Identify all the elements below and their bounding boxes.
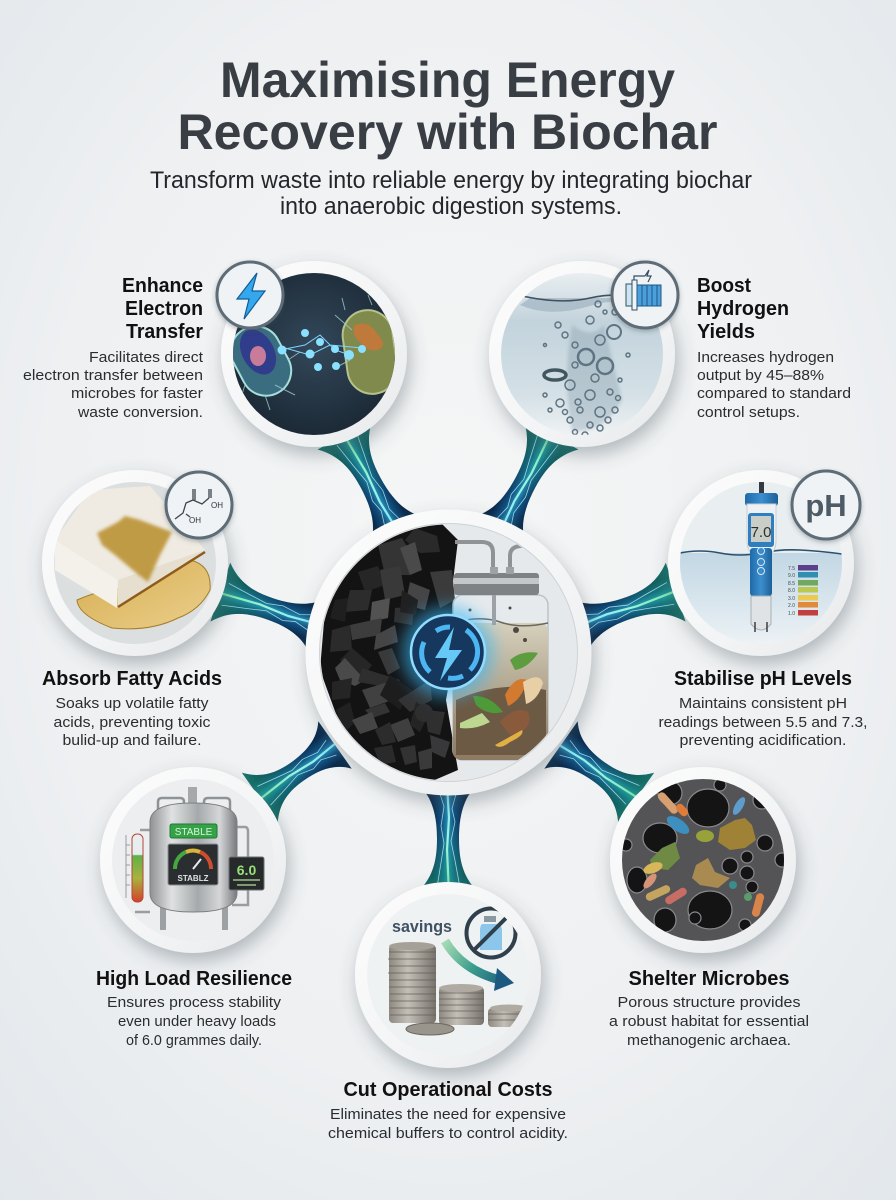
title <box>178 52 718 160</box>
heading: Boost <box>697 275 751 297</box>
subtitle <box>150 167 752 220</box>
bubbles <box>520 294 631 435</box>
biochar pile <box>320 522 458 782</box>
description: Increases hydrogen <box>697 349 834 366</box>
microbes <box>222 295 401 410</box>
description: even under heavy loads <box>118 1013 276 1030</box>
text: enhance electron transfer <box>23 275 204 421</box>
description: waste conversion. <box>77 404 203 421</box>
title: Recovery with Biochar <box>178 104 718 160</box>
description: Maintains consistent pH <box>679 695 847 712</box>
text: stabilise pH levels <box>658 668 868 749</box>
heading: Enhance <box>122 275 203 297</box>
digester tank: 6.0 <box>237 862 256 878</box>
text: boost hydrogen yields <box>697 275 851 421</box>
heading <box>122 275 203 343</box>
description: of 6.0 grammes daily. <box>126 1032 262 1049</box>
description: bulid-up and failure. <box>62 732 202 749</box>
panel: high load resilience image <box>100 767 286 953</box>
description: preventing acidification. <box>680 732 846 749</box>
panel: shelter microbes image <box>610 767 796 953</box>
pH colour scale: 8.0 <box>788 588 795 594</box>
energy icon <box>402 606 494 698</box>
description: acids, preventing toxic <box>54 714 211 731</box>
pH colour scale: 3.0 <box>788 596 795 602</box>
description <box>697 349 851 421</box>
coin stacks <box>388 942 528 1035</box>
description: readings between 5.5 and 7.3, <box>658 714 868 731</box>
description <box>54 695 211 749</box>
icon: crossed bottle <box>466 908 516 958</box>
description: Facilitates direct <box>89 349 204 366</box>
pH meter <box>745 480 778 632</box>
pH colour scale: 1.0 <box>788 611 795 617</box>
description: control setups. <box>697 404 800 421</box>
microbes <box>641 791 765 918</box>
description: Porous structure provides <box>618 994 800 1011</box>
icon: molecule <box>166 472 232 538</box>
text: absorb fatty acids <box>42 668 222 749</box>
description: electron transfer between <box>23 367 203 384</box>
description <box>23 349 204 421</box>
icon: molecule: OH <box>211 501 223 510</box>
icon: pH badge: pH <box>805 488 847 523</box>
panel: enhance electron transfer image <box>217 261 407 447</box>
panel: absorb fatty acids image <box>42 470 232 656</box>
description: Eliminates the need for expensive <box>330 1106 566 1123</box>
porous biochar <box>620 779 789 932</box>
icon: pH badge <box>792 471 860 539</box>
oil pool <box>77 560 210 629</box>
digester tank: STABLE <box>175 827 213 838</box>
description: microbes for faster <box>71 385 203 402</box>
digester jar <box>453 542 548 760</box>
centre hub: biochar and digester <box>306 510 592 796</box>
description <box>328 1106 568 1142</box>
title: Maximising Energy <box>220 52 675 108</box>
subtitle: into anaerobic digestion systems. <box>280 193 622 220</box>
icon: electrolyser <box>612 262 678 328</box>
description: compared to standard <box>697 385 851 402</box>
text: high load resilience <box>96 968 292 1049</box>
panel: cut operational costs image <box>355 882 541 1068</box>
description: a robust habitat for essential <box>609 1013 809 1030</box>
description: output by 45–88% <box>697 367 824 384</box>
pH colour scale: 9.0 <box>788 573 795 579</box>
heading: Transfer <box>126 321 203 343</box>
description: chemical buffers to control acidity. <box>328 1125 568 1142</box>
heading: Cut Operational Costs <box>344 1079 552 1101</box>
heading: Yields <box>697 321 755 343</box>
sponge <box>55 486 205 608</box>
arrow: falling cost <box>445 941 514 991</box>
label: savings: savings <box>392 917 452 936</box>
description: Ensures process stability <box>107 994 282 1011</box>
panel: boost hydrogen yields image <box>489 261 678 447</box>
pH colour scale <box>788 565 818 617</box>
subtitle: Transform waste into reliable energy by integrating biochar <box>150 167 752 194</box>
pH colour scale: 2.0 <box>788 603 795 609</box>
description <box>658 695 868 749</box>
heading: Hydrogen <box>697 298 789 320</box>
energy connectors <box>210 420 686 893</box>
heading: High Load Resilience <box>96 968 292 990</box>
icon: molecule: OH <box>189 516 201 525</box>
panel: stabilise pH levels image <box>668 470 860 656</box>
description: Soaks up volatile fatty <box>56 695 209 712</box>
heading: Absorb Fatty Acids <box>42 668 222 690</box>
heading: Shelter Microbes <box>628 968 790 990</box>
description: methanogenic archaea. <box>627 1032 791 1049</box>
heading <box>697 275 789 343</box>
description <box>107 994 282 1049</box>
description <box>609 994 809 1049</box>
digester tank <box>126 787 264 930</box>
heading: Stabilise pH Levels <box>674 668 852 690</box>
heading: Electron <box>125 298 203 320</box>
text: cut operational costs <box>328 1079 568 1142</box>
icon: lightning bolt <box>217 262 283 328</box>
pH colour scale: 8.5 <box>788 581 795 587</box>
text: shelter microbes <box>609 968 809 1049</box>
pH colour scale: 7.5 <box>788 566 795 572</box>
pH meter: 7.0 <box>751 524 771 541</box>
digester tank: STABLZ <box>178 874 209 883</box>
